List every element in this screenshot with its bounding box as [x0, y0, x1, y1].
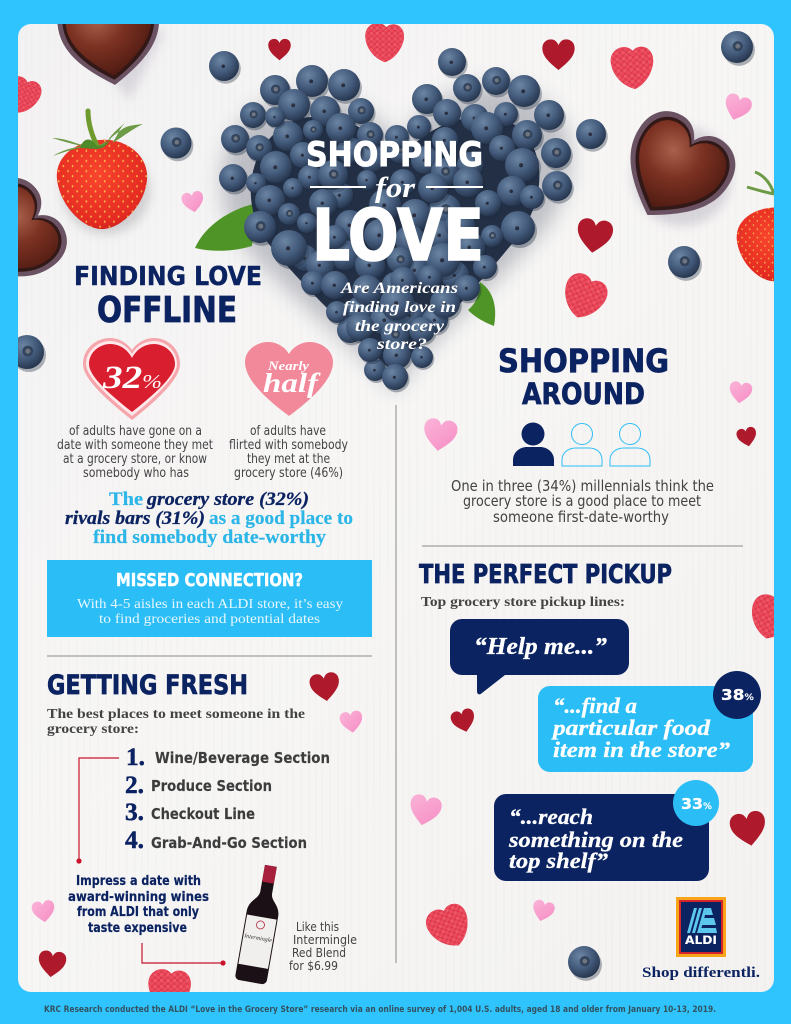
text: impress a date: award-winning wines — [68, 889, 209, 905]
text: impress a date: from ALDI that only — [77, 904, 199, 920]
text: nearly half description — [229, 423, 348, 481]
text: impress a date: Impress a date with — [76, 873, 201, 889]
text: 32 percent description: at a grocery store, or know — [63, 451, 207, 467]
speech bubble: help me: “Help me...” — [474, 634, 607, 660]
speech bubble: find a food item: “...find a — [553, 693, 637, 718]
stat: nearly half heart — [245, 342, 333, 416]
icon: raspberry edge right — [752, 594, 774, 638]
list: best places: Produce Section — [151, 777, 272, 795]
icon: raspberry mid right — [565, 273, 608, 318]
text: wine caption: Red Blend — [292, 945, 346, 960]
callout: grocery store rivals bars: rivals bars (31%) — [65, 509, 205, 529]
tagline: shop differentli: Shop differentli. — [642, 965, 760, 981]
list: best places: 1. — [126, 744, 145, 771]
icon: pink hearts — [31, 92, 754, 924]
text: one in three: grocery store is a good place to meet — [463, 492, 701, 510]
icon: strawberry right — [736, 170, 774, 282]
panel: missed connection — [47, 560, 372, 637]
text: nearly half description: flirted with somebody — [229, 437, 348, 453]
text: one in three — [451, 477, 714, 526]
text: nearly half description: of adults have — [250, 423, 326, 439]
stat: nearly half heart: half — [263, 368, 322, 398]
badge: 38 percent: 38 % — [721, 686, 754, 704]
text: 32 percent description: somebody who has — [83, 465, 189, 481]
speech bubble: reach top shelf: top shelf” — [509, 848, 608, 873]
panel: missed connection: to find groceries and potential dates — [99, 612, 320, 627]
subtitle: store? — [376, 336, 427, 353]
icon: wine bottle — [235, 863, 287, 985]
callout: grocery store rivals bars — [65, 490, 353, 548]
icon: chocolate heart left — [18, 178, 67, 276]
text: impress a date: taste expensive — [88, 920, 187, 936]
logo: ALDI — [676, 897, 726, 957]
heading: finding love offline — [74, 262, 262, 331]
text: wine caption: Like this — [296, 919, 339, 934]
badge: 38 percent — [713, 671, 761, 719]
icon: chocolate heart right — [629, 111, 736, 229]
text: nearly half description: they met at the — [247, 451, 330, 467]
subtitle — [340, 280, 458, 353]
icon: raspberry top right — [610, 46, 654, 89]
speech bubble: find a food item: particular food — [551, 715, 711, 740]
title: SHOPPING — [306, 135, 483, 174]
icon: raspberry top center — [365, 23, 404, 62]
icon: blueberry heart — [195, 48, 608, 392]
subtitle: Are Americans — [340, 280, 458, 297]
list: best places — [125, 744, 330, 854]
heading: the perfect pickup: THE PERFECT PICKUP — [419, 560, 672, 590]
list: best places: 2. — [125, 772, 144, 799]
text: one in three: someone first-date-worthy — [493, 508, 669, 526]
arrow: wine to impress — [76, 758, 119, 864]
speech bubble: find a food item — [538, 671, 761, 772]
title: for — [375, 172, 416, 204]
list: best places: Grab-And-Go Section — [151, 834, 307, 852]
speech bubble: help me — [450, 619, 629, 694]
callout: grocery store rivals bars: find somebody date-worthy — [93, 528, 327, 548]
text: nearly half description: grocery store (46%) — [234, 465, 343, 481]
stat: 32 percent heart — [83, 338, 180, 420]
stat: nearly half heart: Nearly — [267, 358, 309, 373]
icon: one in three people — [513, 422, 650, 466]
list: best places: Checkout Line — [151, 805, 255, 823]
icon: strawberry left — [52, 111, 150, 234]
text: best places intro: grocery store: — [47, 722, 139, 737]
badge: 33 percent: 33% — [681, 795, 712, 813]
heading: finding love offline: OFFLINE — [97, 290, 237, 331]
text: 32 percent description — [57, 423, 213, 481]
text: wine caption — [289, 919, 357, 973]
icon: raspberry bottom left — [148, 969, 191, 992]
speech bubble: reach top shelf: “...reach — [509, 804, 593, 829]
stat: 32 percent heart: 32 % — [102, 360, 162, 396]
panel: missed connection: With 4-5 aisles in each ALDI store, it’s easy — [77, 597, 343, 612]
heading: shopping around: SHOPPING — [498, 342, 669, 380]
text: top pickup lines intro: Top grocery store pickup lines: — [421, 594, 625, 609]
icon: chocolate heart top left — [58, 24, 164, 98]
callout: grocery store rivals bars: grocery store (32%) — [146, 490, 309, 510]
heading: shopping around: AROUND — [522, 377, 645, 411]
text: best places intro: The best places to meet someone in the — [47, 707, 305, 722]
arrow: impress to bottle — [142, 943, 226, 966]
heading: shopping around — [498, 342, 669, 411]
icon: raspberry top left — [18, 76, 42, 113]
icon: left leaf — [195, 203, 258, 251]
text: 32 percent description: date with someone they met — [57, 437, 213, 453]
icon: wine bottle: Intermingle — [243, 933, 273, 944]
icon: right leaf — [468, 282, 495, 326]
text: wine caption: for $6.99 — [289, 958, 338, 973]
subtitle: finding love in — [343, 299, 456, 316]
callout: grocery store rivals bars: as a good place to — [209, 509, 353, 529]
badge: 33 percent — [673, 780, 719, 826]
list: best places: Wine/Beverage Section — [155, 749, 330, 767]
title — [306, 135, 484, 277]
panel: missed connection: MISSED CONNECTION? — [116, 571, 303, 591]
list: best places: 3. — [125, 799, 144, 826]
text: impress a date — [68, 873, 209, 936]
list: best places: 4. — [125, 827, 144, 854]
text: 32 percent description: of adults have gone on a — [69, 423, 202, 439]
icon: raspberry bottom right — [426, 904, 468, 946]
heading: getting fresh: GETTING FRESH — [47, 670, 248, 701]
subtitle: the grocery — [355, 318, 445, 335]
text: one in three: One in three (34%) millennials think the — [451, 477, 714, 495]
heading: finding love offline: FINDING LOVE — [74, 262, 262, 292]
title: LOVE — [312, 194, 484, 277]
speech bubble: reach top shelf — [494, 780, 719, 881]
text: best places intro — [47, 707, 305, 737]
speech bubble: reach top shelf: something on the — [508, 827, 683, 852]
callout: grocery store rivals bars: The — [109, 490, 143, 510]
text: wine caption: Intermingle — [293, 932, 357, 947]
speech bubble: find a food item: item in the store” — [553, 737, 730, 762]
logo: ALDI: ALDI — [685, 933, 717, 947]
